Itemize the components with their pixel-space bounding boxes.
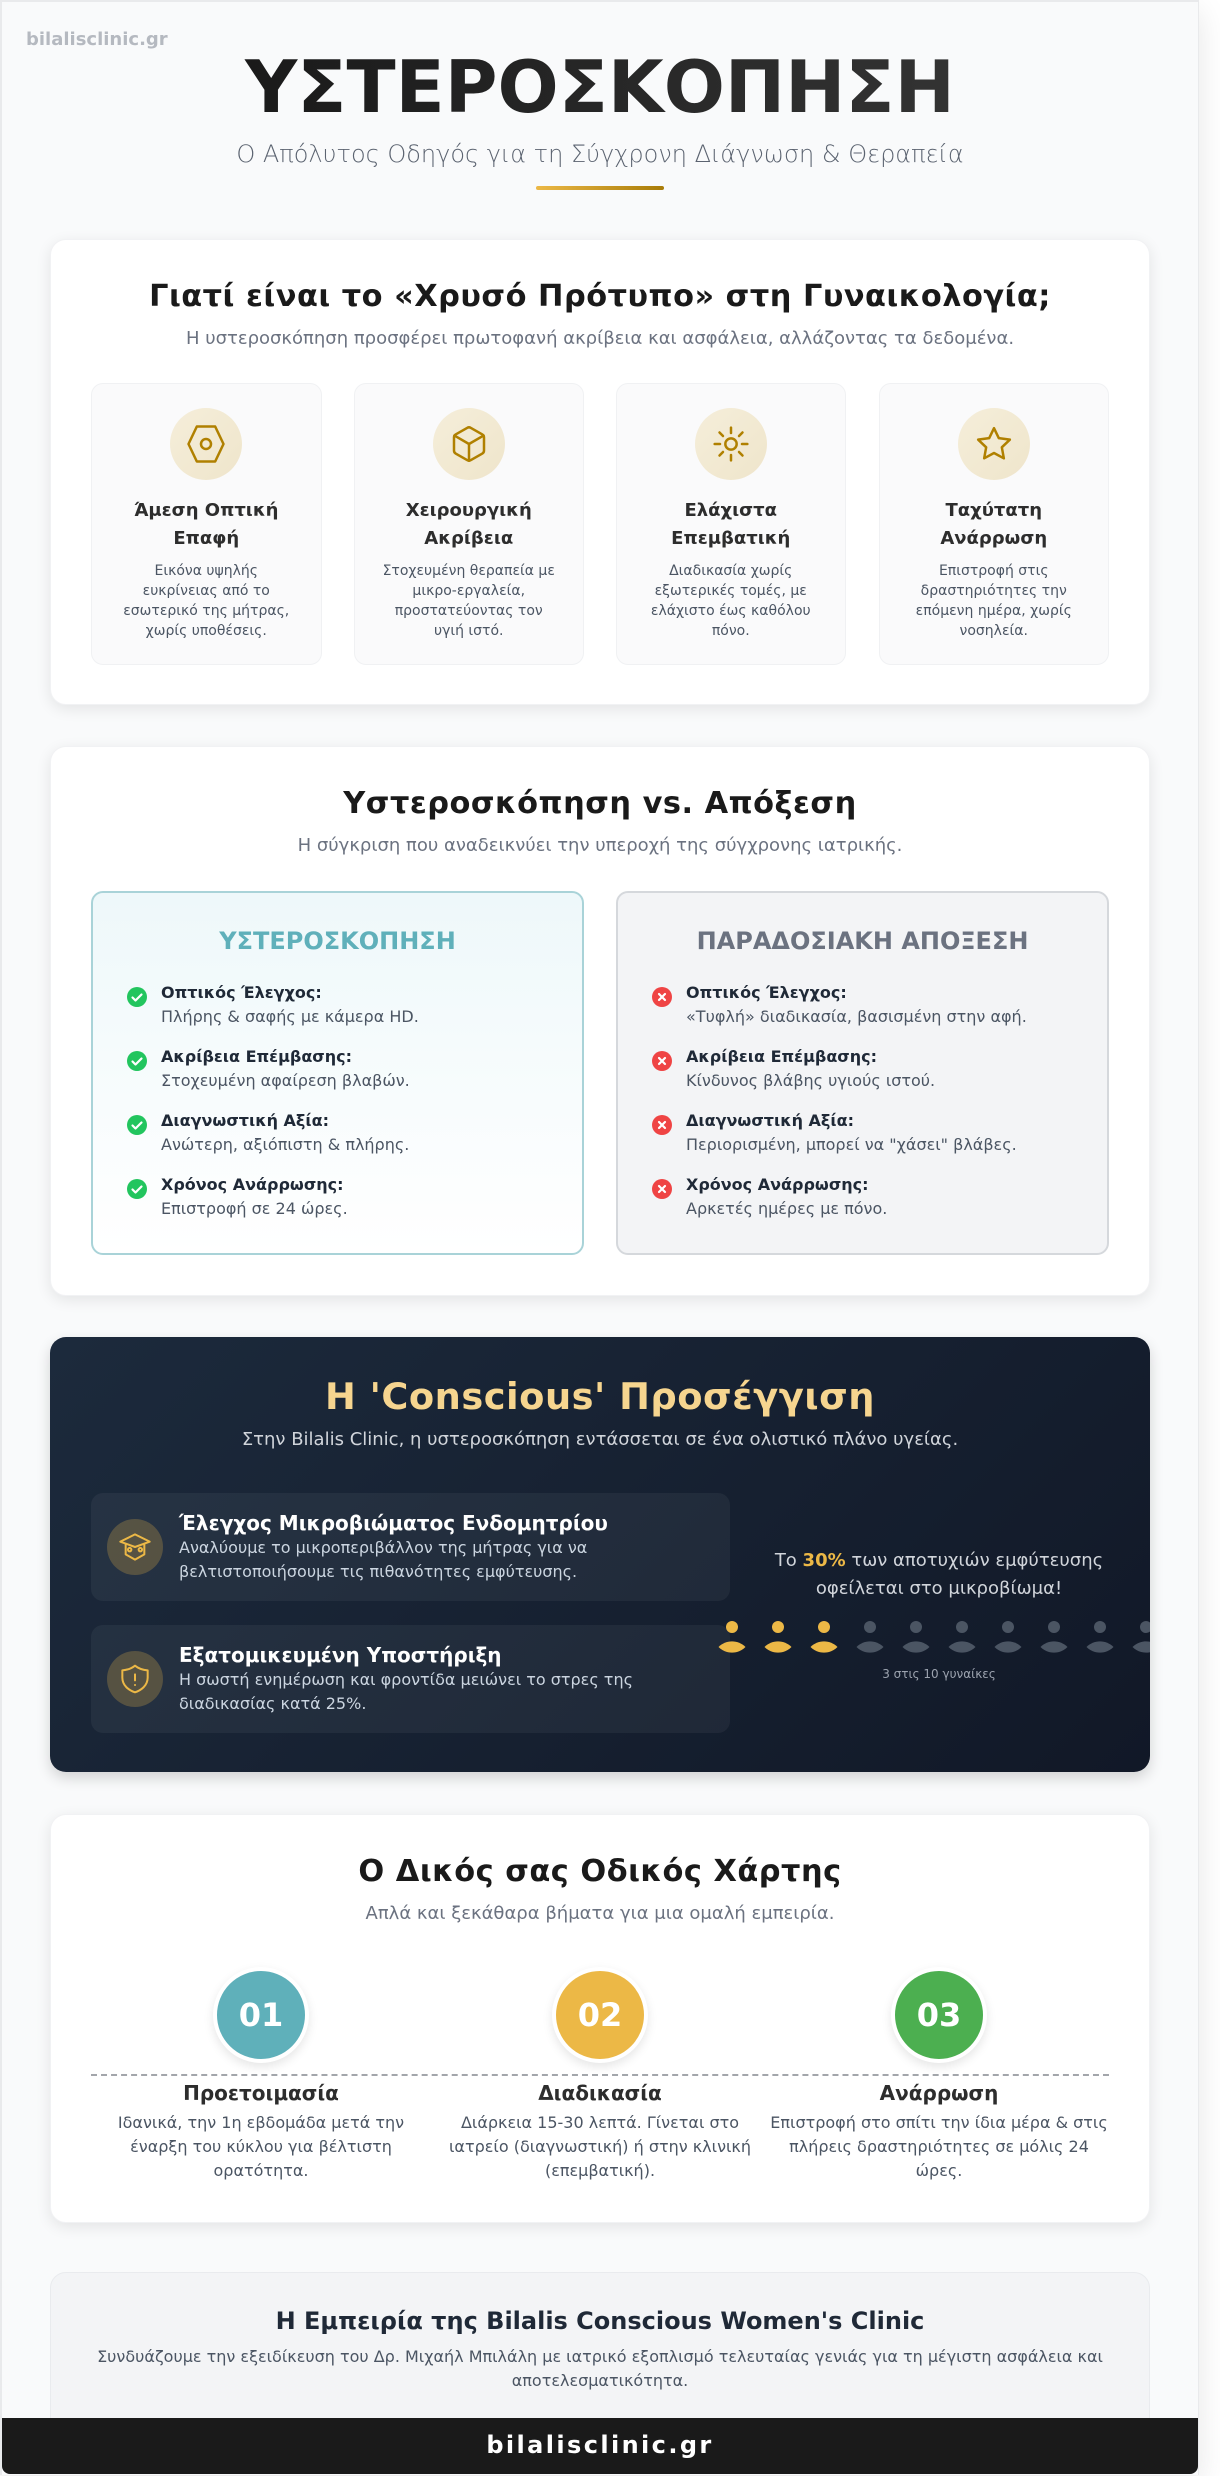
step 2 description (449, 2113, 751, 2180)
row: optical control: «Τυφλή» διαδικασία, βασισμένη στην αφή. (686, 1006, 1027, 1026)
text: why subtitle: Η υστεροσκόπηση προσφέρει πρωτοφανή ακρίβεια και ασφάλεια, αλλάζοντας τα δεδομένα. (186, 328, 1014, 348)
step 3 title: Ανάρρωση (880, 2081, 998, 2105)
title: ΥΣΤΕΡΟΣΚΟΠΗΣΗ (245, 45, 955, 129)
panel: conscious approach (50, 1337, 1150, 1772)
icon: check (127, 987, 147, 1007)
panel: clinic experience (50, 2272, 1150, 2452)
item description: διαδικασίας κατά 25%. (179, 1694, 366, 1713)
feature description (383, 562, 555, 638)
feature description: νοσηλεία. (960, 622, 1028, 638)
step 1 description (118, 2113, 404, 2180)
feature title: Ταχύτατη (945, 500, 1042, 521)
icon: cross (652, 1051, 672, 1071)
heading: roadmap: Ο Δικός σας Οδικός Χάρτης (358, 1854, 842, 1889)
row: diagnostic value: Διαγνωστική Αξία: (161, 1110, 329, 1130)
step 1 description: Ιδανικά, την 1η εβδομάδα μετά την (118, 2113, 404, 2132)
item title: Εξατομικευμένη Υποστήριξη (179, 1643, 502, 1667)
text: roadmap subtitle: Απλά και ξεκάθαρα βήματα για μια ομαλή εμπειρία. (366, 1902, 834, 1924)
row: diagnostic value: Ανώτερη, αξιόπιστη & πλήρης. (161, 1134, 409, 1154)
row: intervention precision: Στοχευμένη αφαίρεση βλαβών. (161, 1070, 410, 1090)
feature description: υγιή ιστό. (434, 622, 504, 638)
pictogram caption: 3 στις 10 γυναίκες (882, 1667, 996, 1681)
icon: check (127, 1115, 147, 1135)
footer bar: bilalisclinic.gr (486, 2431, 714, 2459)
text: clinic experience description: Συνδυάζουμε την εξειδίκευση του Δρ. Μιχαήλ Μπιλάλη με ιατρικό εξοπλισμό τελευταίας γενιάς για τη μέγιστη ασφάλεια και (97, 2347, 1103, 2366)
title (0, 43, 1200, 131)
callout: 30 percent stat: Το 30% των αποτυχιών εμφύτευσης (775, 1550, 1103, 1570)
feature card: minimally invasive (616, 383, 846, 665)
step 1 number: 01 (239, 1996, 283, 2034)
step 2 number (552, 1967, 648, 2063)
text: clinic experience description: αποτελεσματικότητα. (512, 2371, 688, 2390)
icon: check (127, 1051, 147, 1071)
heading: clinic experience: Η Εμπειρία της Bilalis Conscious Women's Clinic (276, 2307, 924, 2335)
feature title: Άμεση Οπτική (134, 500, 278, 521)
feature title: Ανάρρωση (940, 528, 1047, 549)
row: diagnostic value (686, 1110, 1017, 1154)
feature card: direct optical contact (91, 383, 322, 665)
row: intervention precision: Ακρίβεια Επέμβασης: (686, 1046, 877, 1066)
icon: check (127, 1179, 147, 1199)
callout: 30 percent stat (774, 1550, 1103, 1599)
row: intervention precision (161, 1046, 410, 1090)
feature title (940, 500, 1047, 549)
item description: Αναλύουμε το μικροπεριβάλλον της μήτρας για να (179, 1538, 587, 1556)
feature description: δραστηριότητες την (921, 582, 1067, 598)
icon: cross (652, 987, 672, 1007)
row: diagnostic value: Περιορισμένη, μπορεί να "χάσει" βλάβες. (686, 1134, 1017, 1154)
step 2 description: Διάρκεια 15-30 λεπτά. Γίνεται στο (461, 2113, 739, 2132)
column heading: ΥΣΤΕΡΟΣΚΟΠΗΣΗ (219, 926, 456, 954)
feature description: επόμενη ημέρα, χωρίς (916, 602, 1072, 618)
step 2 title: Διαδικασία (538, 2081, 662, 2105)
row: recovery time: Χρόνος Ανάρρωσης: (686, 1174, 869, 1194)
panel: why gold standard (50, 239, 1150, 705)
row: recovery time: Αρκετές ημέρες με πόνο. (686, 1198, 887, 1218)
feature title: Χειρουργική (406, 500, 532, 521)
feature description: Επιστροφή στις (939, 562, 1049, 578)
dark item: personal support (91, 1625, 730, 1733)
row: recovery time (161, 1174, 348, 1218)
panel: roadmap (50, 1814, 1150, 2223)
row: intervention precision: Ακρίβεια Επέμβασης: (161, 1046, 352, 1066)
column heading: ΠΑΡΑΔΟΣΙΑΚΗ ΑΠΟΞΕΣΗ (697, 926, 1028, 954)
feature title: Επεμβατική (671, 528, 790, 549)
step 3 description (770, 2113, 1108, 2180)
feature description: χωρίς υποθέσεις. (146, 622, 267, 638)
item description (179, 1538, 587, 1580)
feature description: εσωτερικό της μήτρας, (123, 602, 289, 618)
pictogram: 3 of 10 women (718, 1621, 1150, 1653)
step 2 number: 02 (578, 1996, 622, 2034)
footer bar (2, 2418, 1198, 2474)
step 1 description: έναρξη του κύκλου για βέλτιστη (130, 2137, 392, 2156)
timeline dashed line (91, 2074, 1109, 2076)
feature description: μικρο-εργαλεία, (412, 582, 525, 598)
text: clinic experience description (97, 2347, 1103, 2390)
feature title: Επαφή (173, 528, 239, 549)
heading: conscious approach: Η 'Conscious' Προσέγγιση (325, 1375, 875, 1418)
row: recovery time: Επιστροφή σε 24 ώρες. (161, 1198, 348, 1218)
item description (179, 1670, 633, 1713)
feature description (651, 562, 811, 638)
feature description: εξωτερικές τομές, με (655, 582, 807, 598)
icon: shield alert (107, 1651, 163, 1707)
heading: why gold standard: Γιατί είναι το «Χρυσό Πρότυπο» στη Γυναικολογία; (149, 279, 1051, 314)
item description: βελτιστοποιήσουμε τις πιθανότητες εμφύτευσης. (179, 1562, 577, 1580)
heading: comparison: Υστεροσκόπηση vs. Απόξεση (343, 786, 857, 821)
comparison column: traditional curettage (616, 891, 1109, 1255)
dark item: microbiome (91, 1492, 730, 1600)
feature title (406, 500, 532, 549)
step 3 number: 03 (917, 1996, 961, 2034)
row: diagnostic value: Διαγνωστική Αξία: (686, 1110, 854, 1130)
feature description (123, 562, 289, 638)
text: conscious subtitle: Στην Bilalis Clinic, η υστεροσκόπηση εντάσσεται σε ένα ολιστικό πλάνο υγείας. (242, 1429, 958, 1450)
step 3 description: Επιστροφή στο σπίτι την ίδια μέρα & στις (770, 2113, 1108, 2132)
row: intervention precision: Κίνδυνος βλάβης υγιούς ιστού. (686, 1070, 935, 1090)
text: comparison subtitle: Η σύγκριση που αναδεικνύει την υπεροχή της σύγχρονης ιατρικής. (298, 834, 902, 856)
item title: Έλεγχος Μικροβιώματος Ενδομητρίου (179, 1510, 608, 1534)
step 2 description: ιατρείο (διαγνωστική) ή στην κλινική (449, 2137, 751, 2156)
step 1 title: Προετοιμασία (183, 2081, 339, 2105)
comparison column: hysteroscopy (91, 891, 584, 1255)
step 2 description: (επεμβατική). (545, 2161, 655, 2180)
feature title (134, 500, 278, 549)
step 3 number (891, 1967, 987, 2063)
row: optical control (686, 982, 1027, 1026)
step 3 description: ώρες. (916, 2161, 962, 2180)
watermark: bilalisclinic.gr (26, 29, 168, 50)
icon: box (432, 408, 504, 480)
row: optical control (161, 982, 419, 1026)
callout: 30 percent stat: οφείλεται στο μικροβίωμα! (816, 1578, 1062, 1599)
icon: graduation cap (107, 1518, 163, 1574)
panel: comparison (50, 746, 1150, 1296)
step 3 description: πλήρεις δραστηριότητες σε μόλις 24 (789, 2137, 1089, 2156)
subtitle: Ο Απόλυτος Οδηγός για τη Σύγχρονη Διάγνωση & Θεραπεία (236, 140, 964, 168)
feature description (916, 562, 1072, 638)
feature description: προστατεύοντας τον (395, 602, 543, 618)
icon: cross (652, 1179, 672, 1199)
step 1 description: ορατότητα. (214, 2161, 308, 2180)
feature title (671, 500, 790, 549)
feature title: Ελάχιστα (684, 500, 777, 521)
feature title: Ακρίβεια (424, 528, 513, 549)
row: optical control: Οπτικός Έλεγχος: (161, 982, 322, 1002)
row: recovery time: Χρόνος Ανάρρωσης: (161, 1174, 344, 1194)
icon: sun (694, 408, 766, 480)
step 1 number (213, 1967, 309, 2063)
title accent bar (536, 186, 664, 190)
row: intervention precision (686, 1046, 935, 1090)
feature description: Διαδικασία χωρίς (669, 562, 792, 578)
feature description: ευκρίνειας από το (143, 582, 270, 598)
feature description: πόνο. (712, 622, 750, 638)
feature card: fast recovery (878, 383, 1109, 665)
row: optical control: Οπτικός Έλεγχος: (686, 982, 847, 1002)
feature description: Στοχευμένη θεραπεία με (383, 562, 555, 578)
item description: Η σωστή ενημέρωση και φροντίδα μειώνει το στρες της (179, 1670, 633, 1689)
icon: hexagon lens (170, 408, 242, 480)
feature description: Εικόνα υψηλής (154, 562, 258, 578)
row: recovery time (686, 1174, 887, 1218)
icon: star (958, 408, 1030, 480)
feature description: ελάχιστο έως καθόλου (651, 602, 811, 618)
row: diagnostic value (161, 1110, 409, 1154)
icon: cross (652, 1115, 672, 1135)
feature card: surgical precision (354, 383, 584, 665)
row: optical control: Πλήρης & σαφής με κάμερα HD. (161, 1006, 419, 1026)
